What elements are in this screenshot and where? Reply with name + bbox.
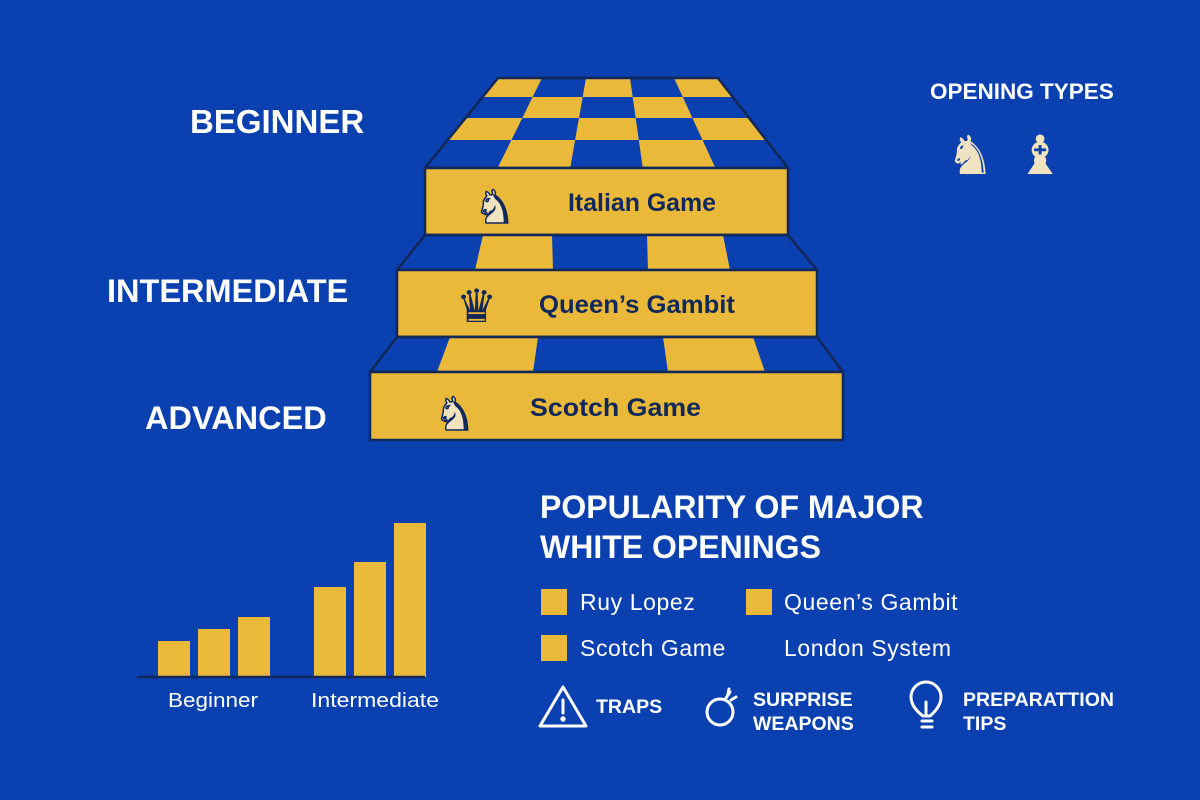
step labels — [530, 189, 736, 422]
step labels: Queen’s Gambit — [539, 291, 736, 319]
step labels: Italian Game — [568, 189, 716, 217]
popularity title — [540, 489, 923, 565]
step icons: ♞ — [474, 180, 515, 234]
step icons: ♛ — [456, 279, 497, 333]
step 2 front: Queen's Gambit — [397, 270, 817, 337]
text: PREPARATTION — [963, 689, 1114, 711]
legend: Ruy Lopez — [580, 589, 695, 615]
step icons: ♞ — [434, 387, 475, 441]
text: TIPS — [963, 713, 1006, 735]
text: Queen’s Gambit — [784, 589, 958, 615]
popularity title: POPULARITY OF MAJOR — [540, 489, 923, 525]
opening type icons: ♝ — [1016, 124, 1064, 187]
step icons — [434, 180, 515, 441]
bar chart: Beginner — [168, 690, 258, 712]
opening type icons: ♞ — [946, 124, 994, 187]
left level labels: BEGINNER — [190, 103, 364, 140]
legend squares — [541, 589, 772, 661]
popularity title: WHITE OPENINGS — [540, 529, 821, 565]
text: SURPRISE — [753, 689, 853, 711]
bottom labels: TRAPS — [596, 696, 662, 718]
text: ADVANCED — [145, 400, 327, 436]
text: INTERMEDIATE — [107, 273, 348, 309]
bar chart: Intermediate — [311, 690, 439, 712]
bottom icons — [540, 682, 941, 727]
text: Scotch Game — [580, 635, 726, 661]
step 3 front: Scotch Game — [370, 372, 843, 440]
step 1 front: Italian Game — [425, 168, 788, 235]
text: WEAPONS — [753, 713, 854, 735]
tread 3 — [370, 337, 843, 372]
step labels: Scotch Game — [530, 394, 701, 422]
tread 2 — [397, 235, 817, 270]
opening type icons — [946, 124, 1064, 187]
top board — [425, 78, 788, 168]
opening types heading: OPENING TYPES — [930, 79, 1114, 104]
text: London System — [784, 635, 952, 661]
bar chart — [137, 523, 439, 712]
